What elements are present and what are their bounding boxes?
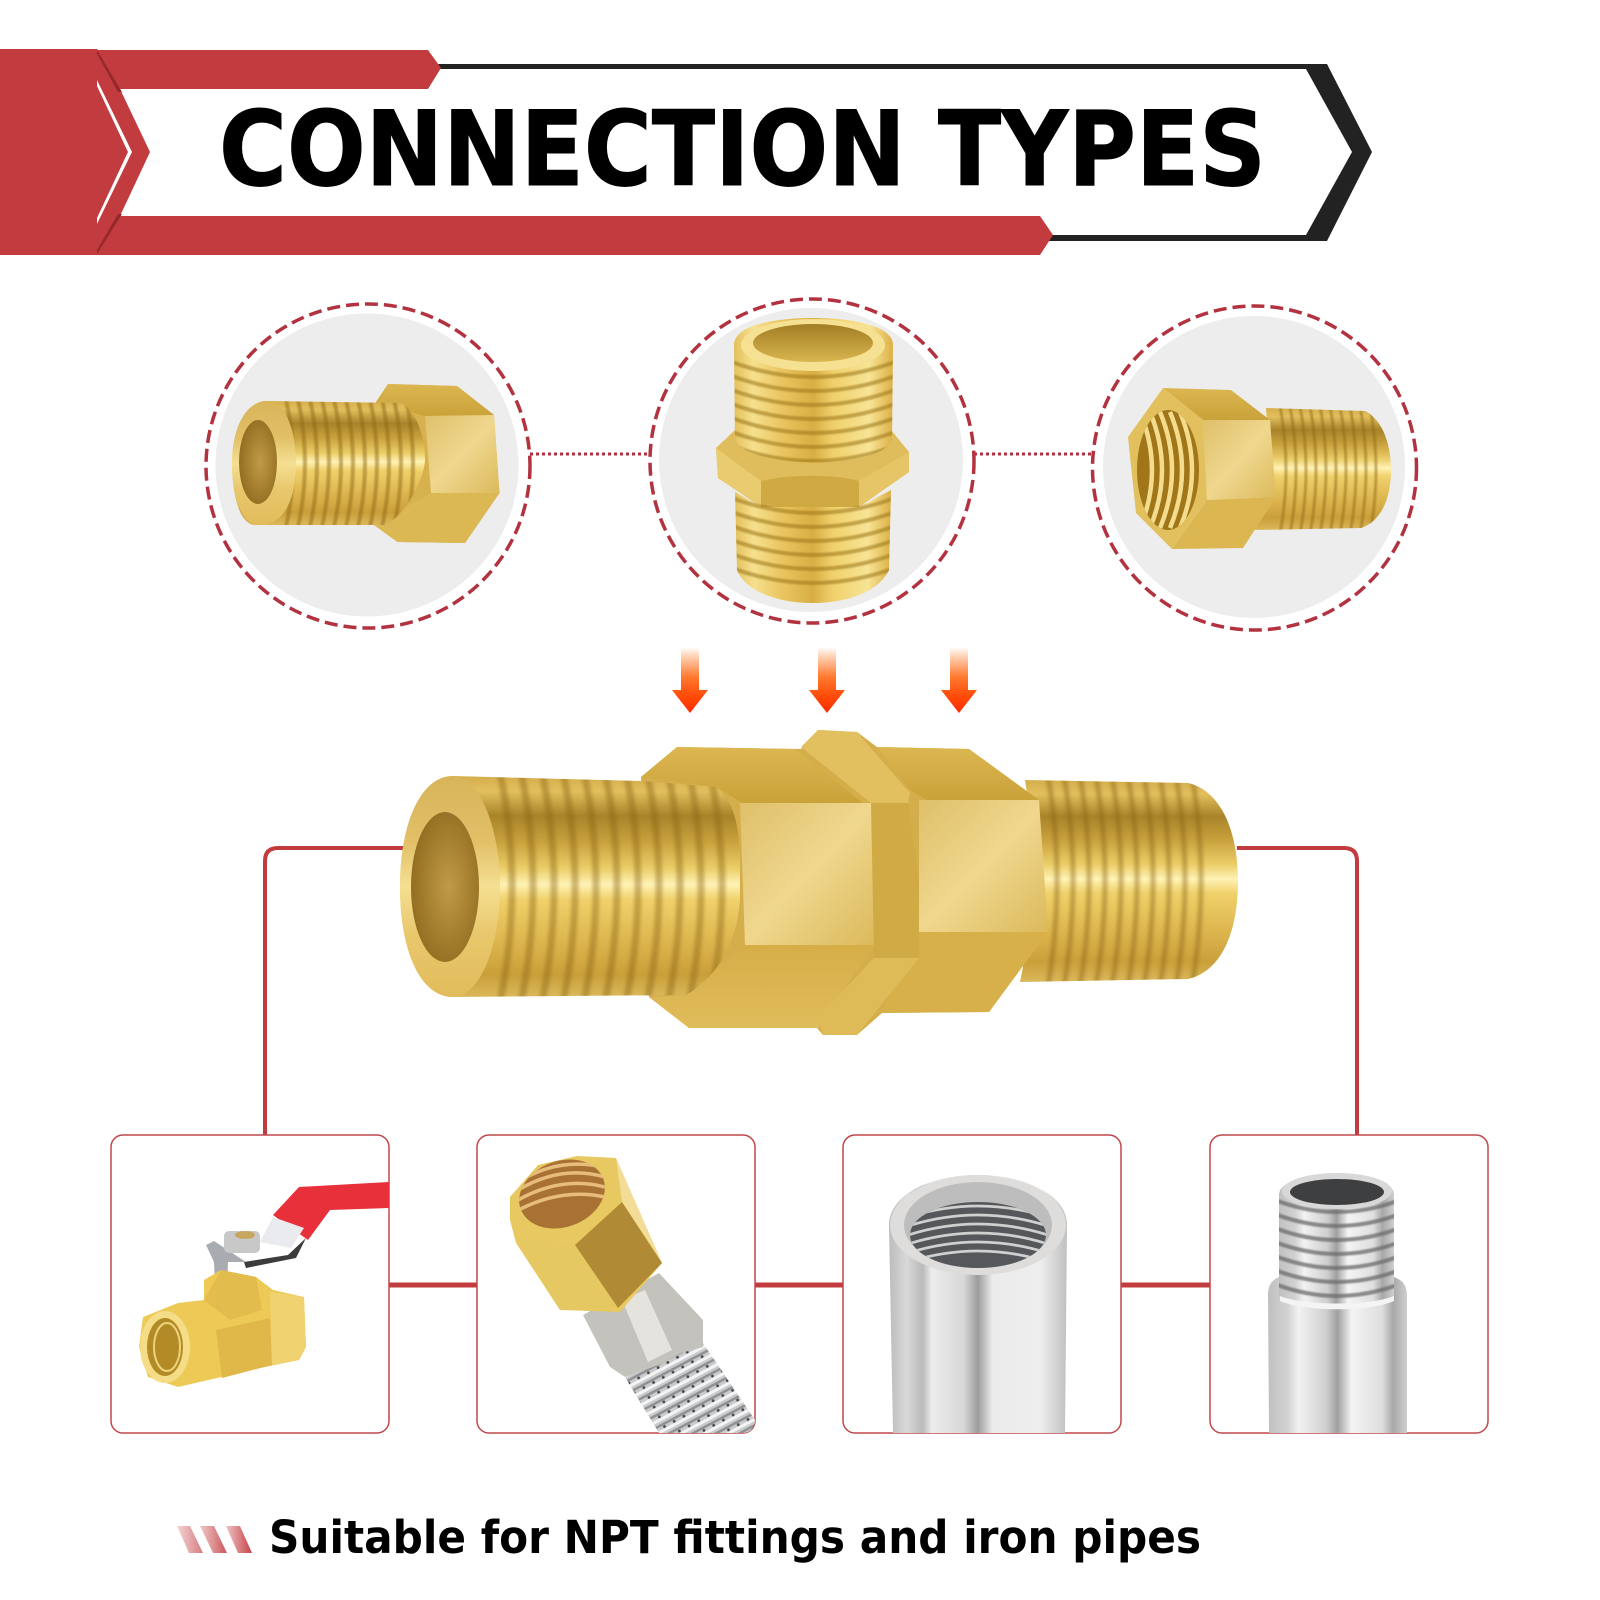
panel: left male fitting [206,304,530,628]
left hex faces [641,747,863,803]
note text: Suitable for NPT fittings and iron pipes [269,1511,1201,1564]
center collar [801,730,910,803]
fitting: lower thread [732,490,895,603]
title banner [0,49,1372,255]
dotted connectors between circles [530,452,1093,456]
fitting: threaded opening [1137,410,1202,530]
fitting: bore [239,420,277,504]
bore [411,812,479,962]
icon: brass nut [509,1148,662,1312]
icon: steel tube [889,1175,1067,1433]
panel: center double male fitting [650,299,974,623]
icon: red lever handle [273,1182,389,1240]
bottom card row connectors [389,1282,1210,1288]
icon: inner thread [905,1202,1051,1268]
icon: braided hose body [625,1343,755,1433]
icon: threaded end [1275,1173,1400,1309]
fitting: hex body [1163,388,1270,420]
fitting: hex collar [716,430,909,507]
fitting: thread [232,399,425,527]
hex silhouette [641,730,1048,1035]
icon: steel tube [1268,1277,1407,1433]
card: male steel pipe [1210,1135,1488,1433]
arrow 2 [809,647,845,713]
icon: brass valve body [139,1270,306,1387]
left thread [400,772,740,1002]
icon: copper threads [519,1160,605,1228]
fitting: hex front faces [716,448,761,507]
banner outline [430,64,1372,241]
icon: slashes [177,1526,252,1553]
title: CONNECTION TYPES [219,90,1266,210]
red banner ribbon [0,49,1053,255]
right thread [1020,776,1238,986]
arrow 1 [672,647,708,713]
panel: right female-male fitting [1092,306,1416,630]
icon: silver ferrule [583,1273,703,1377]
icon: stem and bolt [206,1231,260,1287]
right hex faces [877,747,1039,800]
fitting: hex body [374,384,500,543]
icon: lever neck [260,1217,304,1248]
fitting: thread [1255,406,1391,534]
card: female steel pipe [843,1135,1121,1433]
card: ball valve [111,1135,389,1433]
arrows pointing to fitting [672,647,977,713]
card: braided hose [477,1135,755,1433]
main brass hex nipple [400,730,1238,1035]
arrow 3 [941,647,977,713]
connector: left red line [265,848,403,1135]
fitting: upper thread [732,318,895,462]
footer note [177,1511,1201,1564]
connector: right red line [1237,848,1357,1135]
